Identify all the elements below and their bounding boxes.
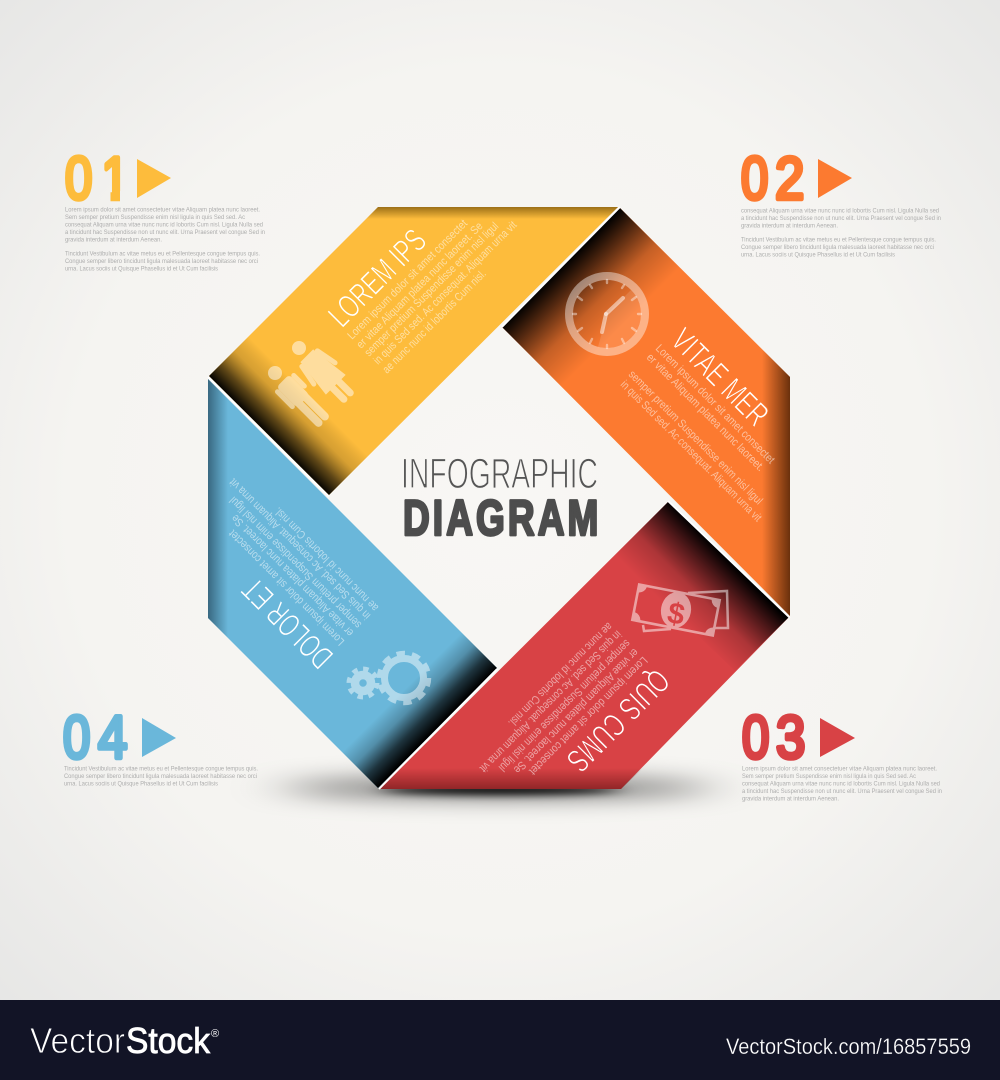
text block: red strip body: ae nunc nunc id lobortis Cum nisl.	[505, 620, 614, 729]
text block: blue strip body: er vitae Aliquam platea nunc laoreet. Se	[230, 512, 356, 638]
footer bar	[0, 1000, 1000, 1080]
text block 02: Tincidunt Vestibulum ac vitae metus eu et Pellentesque congue tempus quis.	[741, 236, 936, 244]
text block: blue strip body	[226, 475, 381, 647]
text block 01: Tincidunt Vestibulum ac vitae metus eu et Pellentesque congue tempus quis.	[65, 250, 260, 258]
text block 02: a tincidunt hac Suspendisse non ut nunc elit. Urna Praesent vel congue Sed in	[741, 215, 941, 222]
heading: DOLOR ET: DOLOR ET	[235, 571, 340, 676]
heading: INFOGRAPHIC: INFOGRAPHIC	[401, 450, 598, 498]
number 03: 3	[776, 704, 805, 771]
text block: blue strip body: semper pretium Suspendisse enim nisl ligul	[228, 494, 364, 630]
number 03	[742, 703, 805, 771]
arrow 01	[137, 159, 171, 198]
text block 01: Congue semper libero tincidunt ligula malesuada laoreet habitasse nec orci	[65, 258, 258, 265]
text block 03	[742, 766, 942, 802]
number 01	[65, 154, 120, 202]
icon: clock	[569, 276, 645, 352]
panel: step 3 red strip	[380, 502, 789, 789]
text block 04: Congue semper libero tincidunt ligula malesuada laoreet habitasse nec orci	[64, 773, 257, 780]
icon: dollar sign: $	[665, 596, 688, 632]
callout: step 03	[742, 703, 942, 802]
number 04: 4	[98, 704, 127, 771]
logo: VectorStock: Stock	[126, 1020, 211, 1061]
text block: orange strip body: in quis Sed sed. Ac consequat. Aliquam urna vit	[618, 379, 764, 525]
logo: VectorStock	[30, 1020, 211, 1061]
text block: orange strip body: semper pretium Suspendisse enim nisl ligul	[626, 369, 764, 507]
text block: yellow strip body: er vitae Aliquam platea nunc laoreet. Se	[355, 220, 485, 351]
text block: orange strip body: Lorem ipsum dolor sit amet consectet	[653, 343, 777, 467]
text block: blue strip body: in quis Sed sed. Ac consequat. Aliquam urna vit	[227, 475, 373, 621]
text block 04: urna. Lacus sociis ut Quisque Phasellus id et Ut Cum facilisis	[64, 780, 219, 788]
heading: QUIS CUMS: QUIS CUMS	[560, 662, 677, 779]
callout: step 04	[63, 703, 258, 788]
text block 01: gravida interdum at interdum Aenean.	[65, 236, 162, 244]
text block: red strip body	[477, 620, 649, 777]
number 02: 0	[741, 144, 768, 212]
fold lines	[208, 207, 790, 789]
text block: yellow strip body	[346, 217, 520, 376]
text block 03: Sem semper pretium Suspendisse enim nisl ligula in quis Sed sed. Ac	[742, 773, 917, 780]
number 02: 2	[775, 145, 804, 212]
text block 02	[741, 208, 941, 258]
text block 02: urna. Lacus sociis ut Quisque Phasellus id et Ut Cum facilisis	[741, 252, 896, 258]
text block 03: consequat Aliquam urna vitae nunc nunc id lobortis Cum nisl. Ligula Nulla sed	[742, 780, 940, 788]
icon: gears	[349, 654, 428, 702]
number 01: 0	[65, 144, 92, 212]
text block: blue strip body: Lorem ipsum dolor sit amet consectet	[226, 527, 347, 647]
text block: yellow strip body: Lorem ipsum dolor sit amet consectet	[346, 217, 471, 342]
icon: people	[262, 332, 358, 428]
image id: VectorStock.com/16857559	[726, 1034, 971, 1059]
registered mark: ®	[211, 1028, 219, 1040]
arrow 04	[142, 718, 176, 757]
icon: money	[632, 585, 728, 635]
panel: step 1 yellow strip	[209, 207, 618, 495]
text block: red strip body: Lorem ipsum dolor sit amet consectet	[526, 654, 649, 777]
text block: orange strip body: er vitae Aliquam platea nunc laoreet.	[644, 352, 766, 474]
text block: yellow strip body: in quis Sed sed. Ac consequat. Aliquam urna vit	[372, 219, 520, 367]
center title	[401, 450, 598, 546]
text block 03: Lorem ipsum dolor sit amet consectetuer vitae Aliquam platea nunc laoreet.	[742, 766, 937, 772]
text block: red strip body: semper pretium Suspendisse enim nisl ligul	[496, 637, 632, 773]
arrow 03	[820, 718, 855, 757]
text block 01: consequat Aliquam urna vitae nunc nunc id lobortis Cum nisl. Ligula Nulla sed	[65, 222, 263, 228]
callout: step 02	[741, 144, 941, 258]
text block: red strip body: er vitae Aliquam platea nunc laoreet. Se	[511, 646, 640, 775]
text block 03: a tincidunt hac Suspendisse non ut nunc elit. Urna Praesent vel congue Sed in	[742, 788, 942, 795]
heading: VITAE MER: VITAE MER	[664, 321, 776, 433]
number 01: 1	[102, 144, 129, 212]
panel: step 2 orange strip	[502, 208, 790, 616]
heading: LOREM IPS: LOREM IPS	[321, 222, 433, 334]
text block 01: Sem semper pretium Suspendisse enim nisl ligula in quis Sed sed. Ac	[65, 214, 246, 221]
text block 01: urna. Lacus sociis ut Quisque Phasellus id et Ut Cum facilisis	[65, 266, 219, 272]
heading: DIAGRAM: DIAGRAM	[403, 491, 598, 546]
text block 01: Lorem ipsum dolor sit amet consectetuer vitae Aliquam platea nunc laoreet.	[65, 206, 260, 214]
panel: step 4 blue strip	[208, 379, 497, 788]
text block 04	[64, 766, 258, 788]
number 04: 0	[63, 703, 90, 771]
logo: VectorStock: Vector	[30, 1020, 125, 1061]
callout: step 01	[65, 144, 265, 272]
text block: red strip body: in quis Sed sed. Ac consequat. Aliquam urna vit	[477, 628, 623, 775]
text block 01	[65, 206, 265, 272]
text block: blue strip body: ae nunc nunc id lobortis Cum nisl.	[272, 504, 381, 613]
number 04	[63, 703, 127, 771]
text block 02: consequat Aliquam urna vitae nunc nunc id lobortis Cum nisl. Ligula Nulla sed	[741, 208, 939, 214]
text block 04: Tincidunt Vestibulum ac vitae metus eu et Pellentesque congue tempus quis.	[64, 766, 258, 772]
text block: yellow strip body: semper pretium Suspendisse enim nisl ligul	[363, 221, 501, 359]
text block: yellow strip body: ae nunc nunc id lobortis Cum nisl.	[381, 268, 489, 376]
text block 02: gravida interdum at interdum Aenean.	[741, 222, 838, 230]
text block 01: a tincidunt hac Suspendisse non ut nunc elit. Urna Praesent vel congue Sed in	[65, 229, 265, 236]
number 02	[741, 144, 804, 212]
text block 03: gravida interdum at interdum Aenean.	[742, 796, 839, 802]
ground shadow	[282, 777, 712, 799]
arrow 02	[818, 159, 852, 198]
number 03: 0	[742, 703, 769, 771]
text block 02: Congue semper libero tincidunt ligula malesuada laoreet habitasse nec orci	[741, 244, 934, 251]
